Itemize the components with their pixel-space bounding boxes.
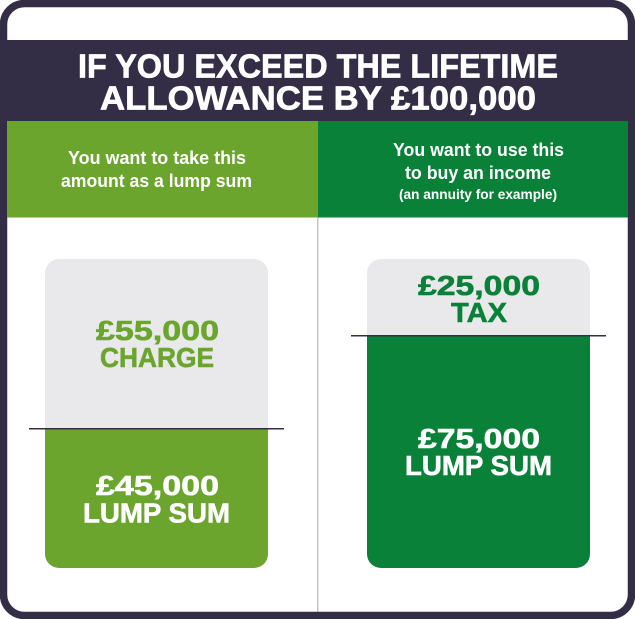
panel: income header: to buy an income xyxy=(405,162,551,183)
lump sum portion: £75,000 xyxy=(418,423,540,454)
panel: income bar xyxy=(351,259,606,568)
charge portion: £55,000 xyxy=(96,315,219,346)
title banner xyxy=(7,40,628,121)
panel: lump sum header: amount as a lump sum xyxy=(61,170,252,191)
lump sum portion xyxy=(45,429,268,568)
charge portion xyxy=(45,259,268,429)
charge portion: CHARGE xyxy=(100,342,214,373)
tax portion: TAX xyxy=(451,297,507,328)
title banner: IF YOU EXCEED THE LIFETIME xyxy=(78,48,558,84)
panel: lump sum header xyxy=(7,121,318,218)
tax portion: £25,000 xyxy=(418,270,540,301)
lump sum portion: £45,000 xyxy=(96,470,219,501)
lump sum portion: LUMP SUM xyxy=(83,498,230,528)
panel: lump sum bar xyxy=(29,259,284,568)
lump sum portion xyxy=(367,336,590,568)
panel: lump sum header: You want to take this xyxy=(68,147,246,168)
panel: income header xyxy=(318,121,628,218)
tax portion xyxy=(367,259,590,336)
panel: income header: You want to use this xyxy=(393,139,564,160)
lump sum portion: LUMP SUM xyxy=(405,450,552,481)
title banner: ALLOWANCE BY £100,000 xyxy=(100,79,536,116)
panel: income header: (an annuity for example) xyxy=(399,186,557,202)
